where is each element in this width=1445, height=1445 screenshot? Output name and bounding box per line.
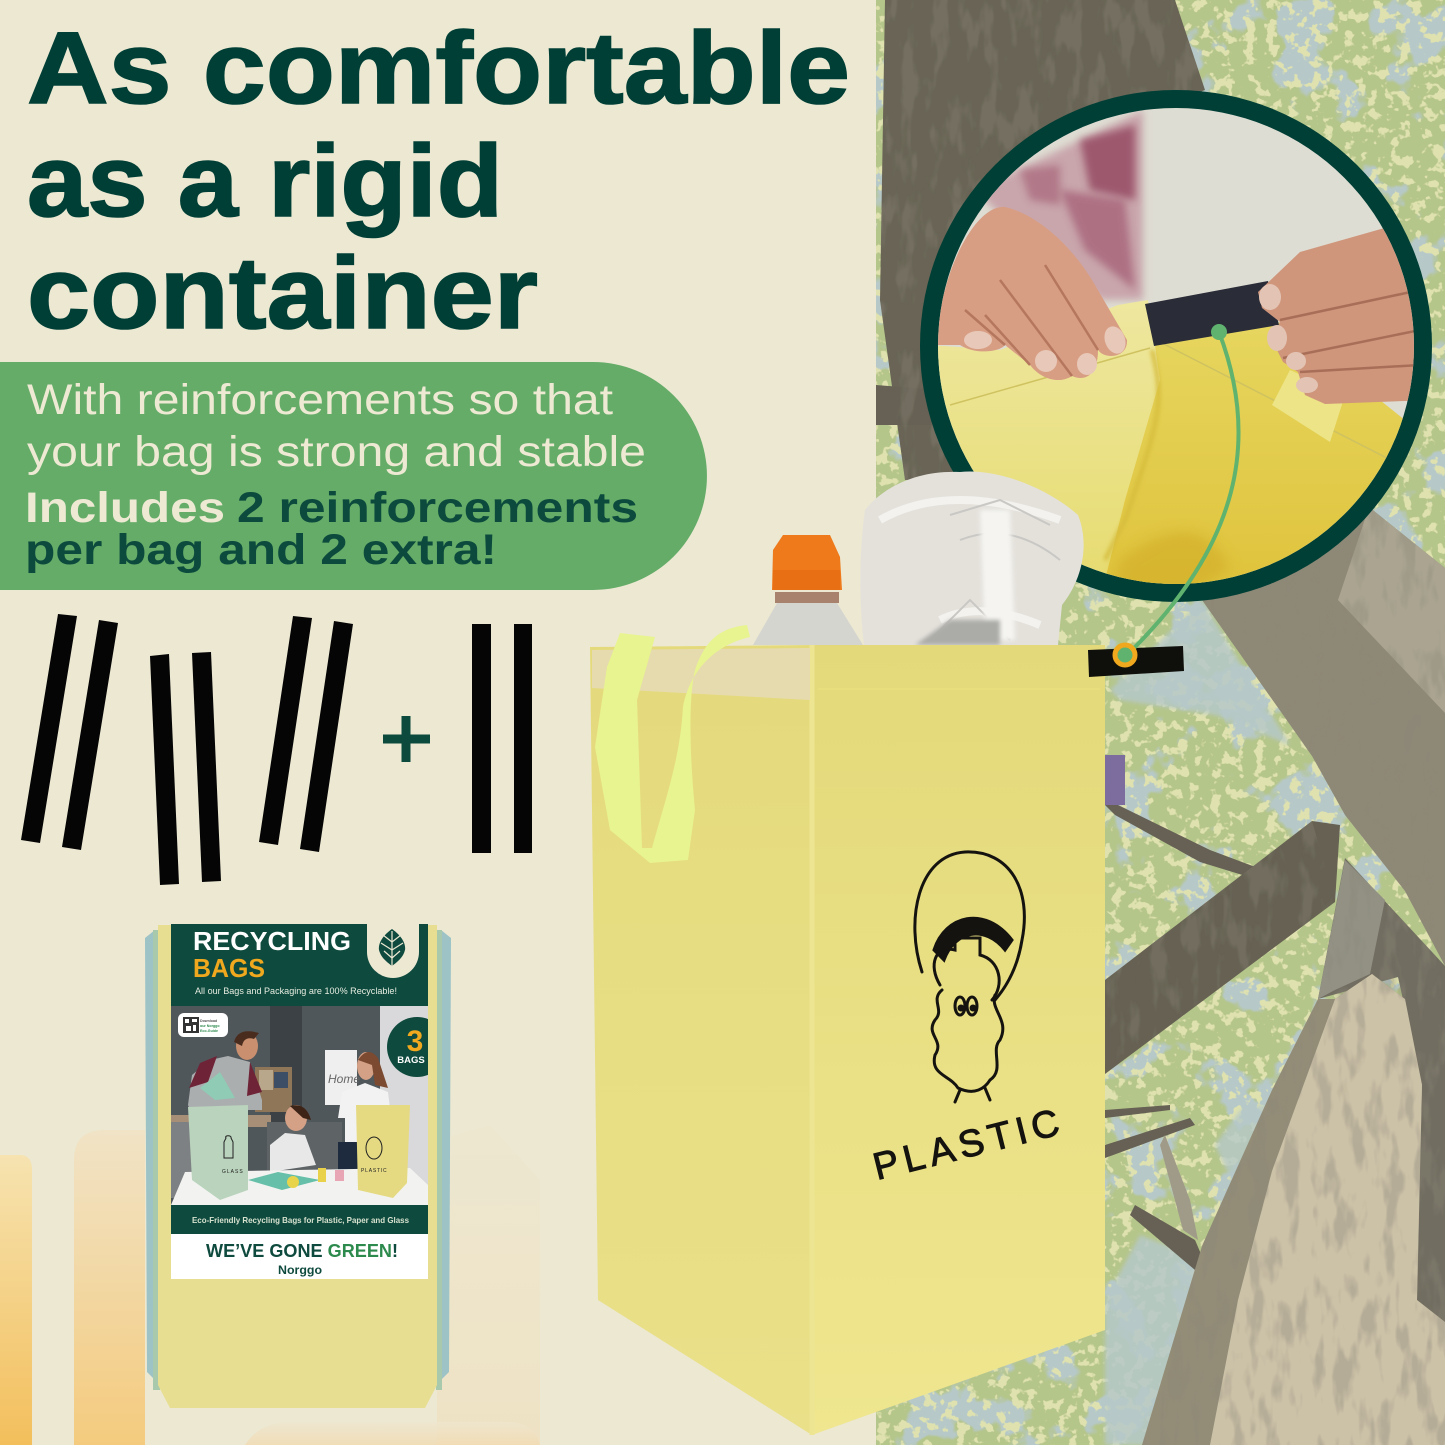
title: container (27, 236, 538, 350)
QR badge: our Norggo (200, 1024, 220, 1028)
package photo: GLASS (222, 1169, 244, 1175)
zoom circle: detail of reinforcement (920, 90, 1432, 602)
callout description text: With reinforcements so that (27, 376, 613, 424)
3 bags badge (387, 1017, 428, 1077)
title: as a rigid (27, 124, 503, 238)
bag side face (590, 645, 812, 1435)
callout description text (27, 376, 646, 476)
decorative orange shapes bottom left (0, 1125, 540, 1445)
package heading: RECYCLING (193, 926, 351, 956)
package band (171, 1205, 428, 1234)
shirt pattern (975, 110, 1143, 300)
bag front face (812, 645, 1105, 1435)
right fingernails (1259, 284, 1318, 393)
QR badge: Eco-Guide (200, 1029, 218, 1033)
black reinforcement strip (1145, 281, 1279, 346)
3 bags badge: BAGS (397, 1055, 425, 1066)
bag inner right panel (1104, 322, 1403, 584)
left finger gaps (965, 265, 1098, 376)
QR badge: Download (200, 1019, 217, 1023)
plus sign (383, 716, 430, 762)
plastic recycling bag (590, 472, 1184, 1435)
package slogan: WE’VE GONE GREEN! (206, 1241, 398, 1261)
title (27, 11, 850, 350)
title: As comfortable (27, 11, 850, 125)
callout bold text: Includes (25, 484, 225, 532)
product package (145, 924, 451, 1408)
callout bold text: 2 reinforcements (237, 484, 638, 532)
3 bags badge: 3 (407, 1025, 423, 1058)
package photo (171, 1006, 428, 1205)
purple tag on bag (1105, 755, 1125, 805)
package card: Eco-Friendly Recycling Bags for Plastic, Paper and Glass (192, 1215, 409, 1225)
photo background: trees (876, 0, 1445, 1445)
dark vertical trunk behind (1318, 858, 1445, 1325)
top-left trunk (880, 0, 1205, 480)
right finger gaps (1280, 290, 1420, 372)
package card: Norggo (278, 1263, 322, 1277)
black tab on bag (1088, 646, 1184, 677)
upper diagonal trunk (1202, 507, 1445, 966)
package photo: Home (328, 1072, 360, 1086)
hand right (1258, 228, 1414, 404)
bag left panel (938, 300, 1160, 574)
lower bright trunk (1142, 974, 1445, 1445)
left fingernails (964, 323, 1129, 375)
package card: All our Bags and Packaging are 100% Recyclable! (195, 986, 397, 996)
package card (171, 924, 447, 1279)
panel: green reinforcement callout (0, 362, 707, 590)
branch left (876, 385, 898, 425)
crushed plastic bottle (860, 472, 1084, 645)
callout bold text (25, 484, 638, 574)
icon: plastic bottle character (915, 852, 1024, 1102)
bag handle (595, 625, 750, 863)
dark branch (1105, 821, 1340, 1074)
orange-cap bottle (753, 535, 863, 645)
strap tab (1272, 370, 1345, 442)
tan reinforcement band (592, 648, 810, 700)
connector line from tab to zoom circle (1115, 324, 1239, 665)
reinforcement strips (21, 614, 532, 885)
callout description text: your bag is strong and stable (27, 428, 646, 476)
package photo: PLASTIC (361, 1168, 387, 1174)
callout bold text: per bag and 2 extra! (25, 526, 497, 574)
bag label: PLASTIC (869, 1102, 1064, 1189)
package leaf badge (367, 924, 419, 978)
package card: BAGS (193, 953, 265, 983)
hand left (925, 207, 1127, 380)
QR badge (178, 1013, 228, 1037)
